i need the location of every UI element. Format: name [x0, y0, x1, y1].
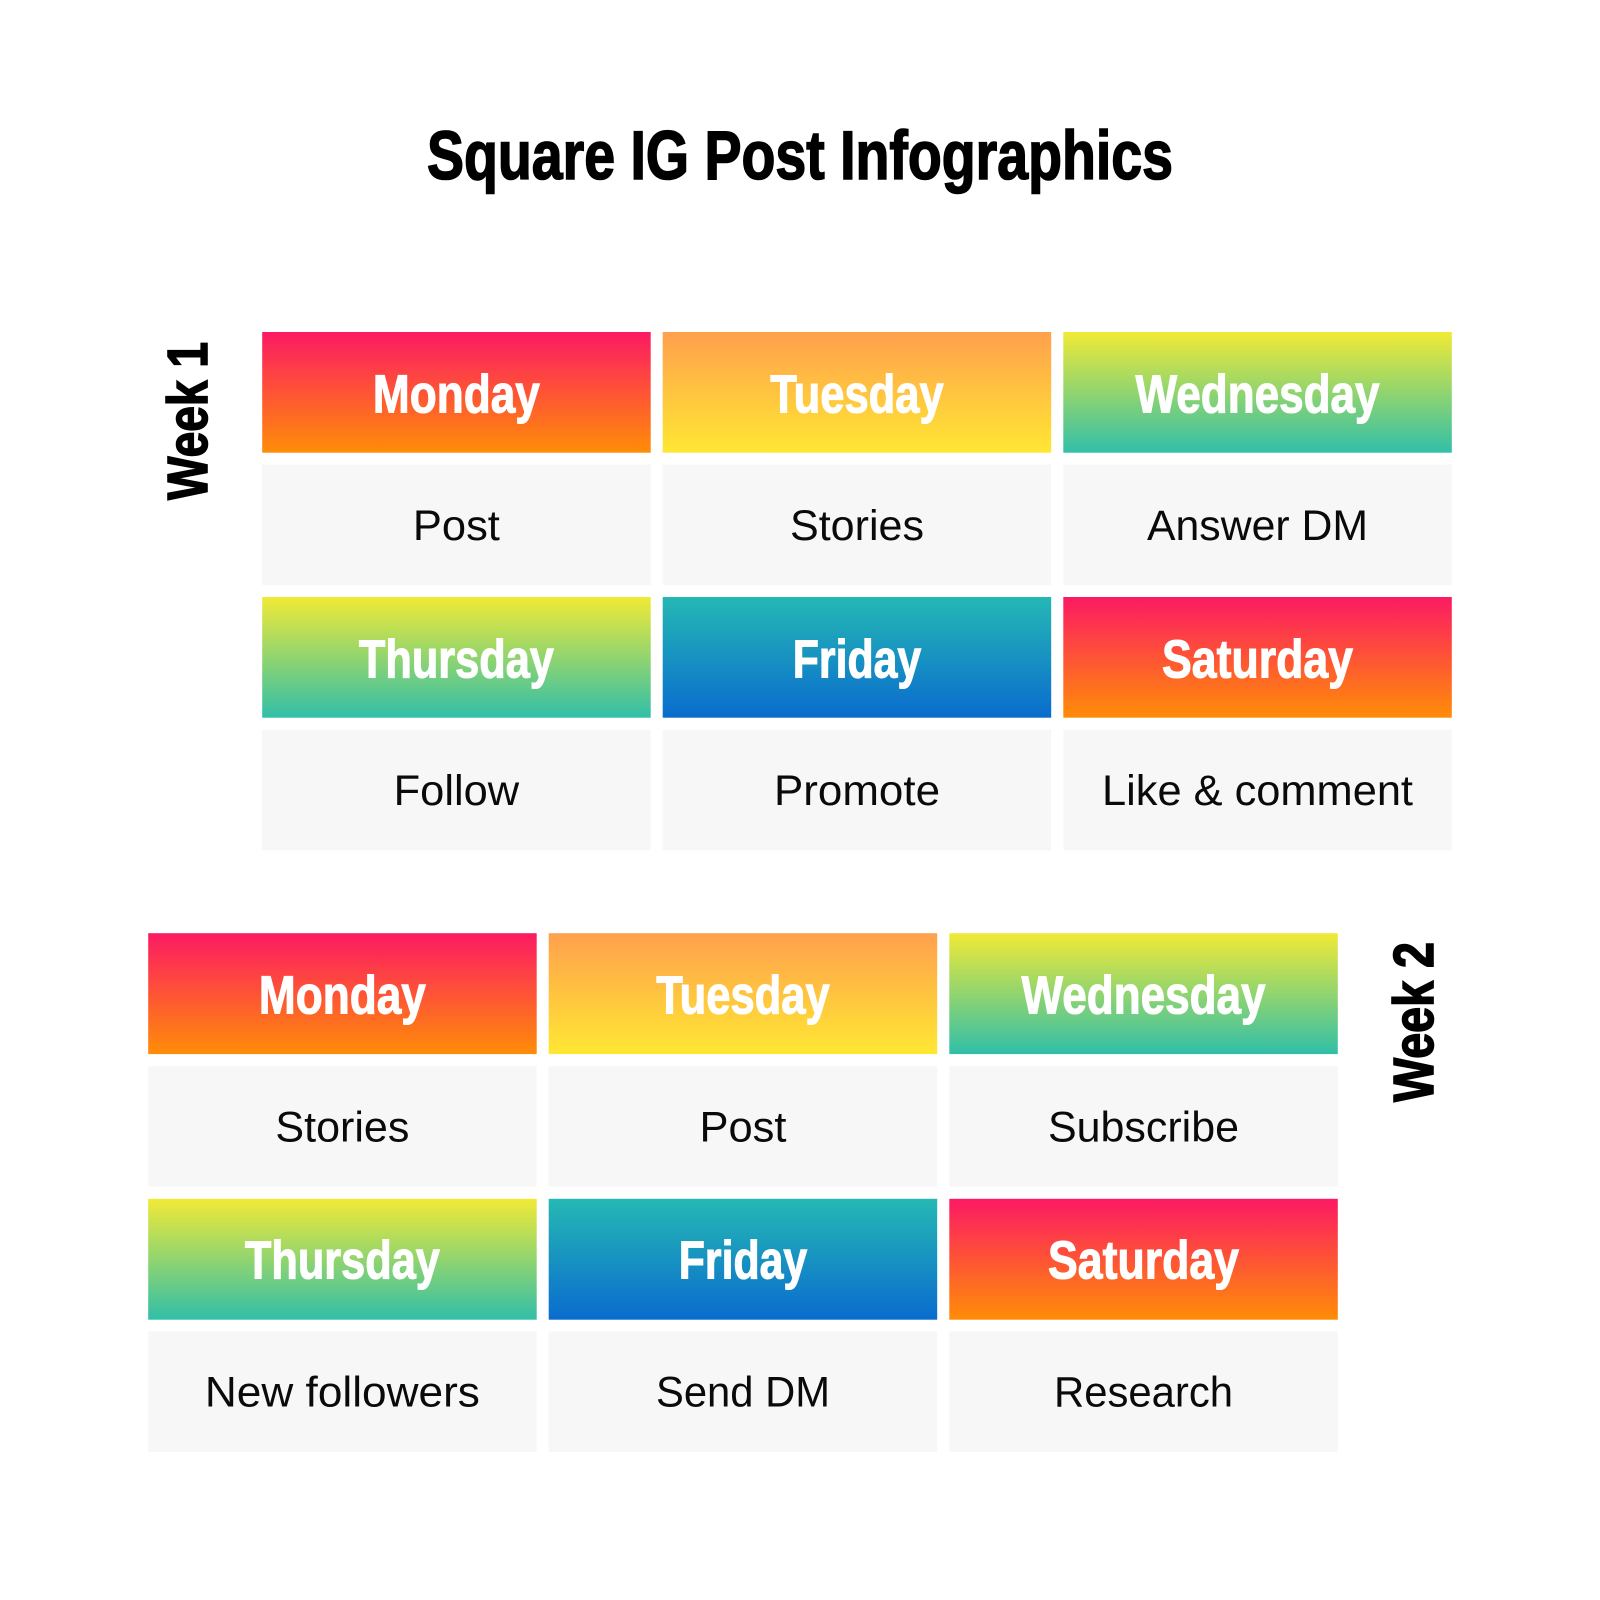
- header: Saturday: [949, 1199, 1338, 1320]
- cell: Answer DM: [1063, 464, 1452, 585]
- cell: Post: [262, 464, 651, 585]
- cell: Promote: Promote: [774, 767, 940, 815]
- header: Monday: Monday: [373, 364, 540, 424]
- header: Thursday: Thursday: [245, 1230, 440, 1290]
- cell: Post: [549, 1066, 937, 1187]
- cell: Answer DM: Answer DM: [1147, 502, 1368, 550]
- header: Friday: Friday: [793, 630, 921, 690]
- title: Square IG Post Infographics: [427, 117, 1173, 194]
- cell: Post: Post: [413, 502, 500, 550]
- cell: Stories: Stories: [275, 1104, 409, 1152]
- cell: Promote: [663, 730, 1051, 850]
- header: Thursday: [148, 1199, 537, 1320]
- header: Thursday: Thursday: [359, 630, 554, 690]
- cell: Post: Post: [700, 1104, 787, 1152]
- header: Friday: Friday: [679, 1230, 807, 1290]
- cell: Research: Research: [1054, 1368, 1233, 1416]
- header: Monday: [262, 332, 651, 453]
- cell: Subscribe: Subscribe: [1048, 1104, 1239, 1152]
- cell: Stories: [148, 1066, 537, 1187]
- cell: Send DM: [549, 1331, 937, 1452]
- cell: Send DM: Send DM: [656, 1368, 830, 1416]
- cell: Stories: Stories: [790, 502, 924, 550]
- header: Thursday: [262, 597, 651, 718]
- panel: week 2 schedule: [148, 933, 1338, 1452]
- header: Wednesday: [1063, 332, 1452, 453]
- header: Monday: Monday: [259, 966, 426, 1026]
- cell: Stories: [663, 464, 1051, 585]
- cell: Research: [949, 1331, 1338, 1452]
- header: Wednesday: [949, 933, 1338, 1054]
- panel: week 1 schedule: [262, 332, 1452, 850]
- header: Saturday: [1063, 597, 1452, 718]
- label: Week 2: Week 2: [1382, 942, 1446, 1102]
- header: Tuesday: Tuesday: [770, 364, 944, 424]
- cell: Follow: [262, 730, 651, 850]
- header: Wednesday: Wednesday: [1022, 966, 1266, 1026]
- header: Tuesday: [663, 332, 1051, 453]
- header: Friday: [549, 1199, 937, 1320]
- cell: Like & comment: Like & comment: [1102, 767, 1413, 815]
- header: Monday: [148, 933, 537, 1054]
- cell: New followers: New followers: [205, 1368, 480, 1416]
- cell: New followers: [148, 1331, 537, 1452]
- header: Friday: [663, 597, 1051, 718]
- cell: Follow: Follow: [394, 767, 520, 815]
- header: Tuesday: Tuesday: [656, 966, 830, 1026]
- header: Tuesday: [549, 933, 937, 1054]
- header: Saturday: Saturday: [1162, 630, 1353, 690]
- label: Week 1: Week 1: [156, 342, 220, 500]
- cell: Like & comment: [1063, 730, 1452, 850]
- header: Wednesday: Wednesday: [1136, 364, 1380, 424]
- header: Saturday: Saturday: [1048, 1230, 1239, 1290]
- cell: Subscribe: [949, 1066, 1338, 1187]
